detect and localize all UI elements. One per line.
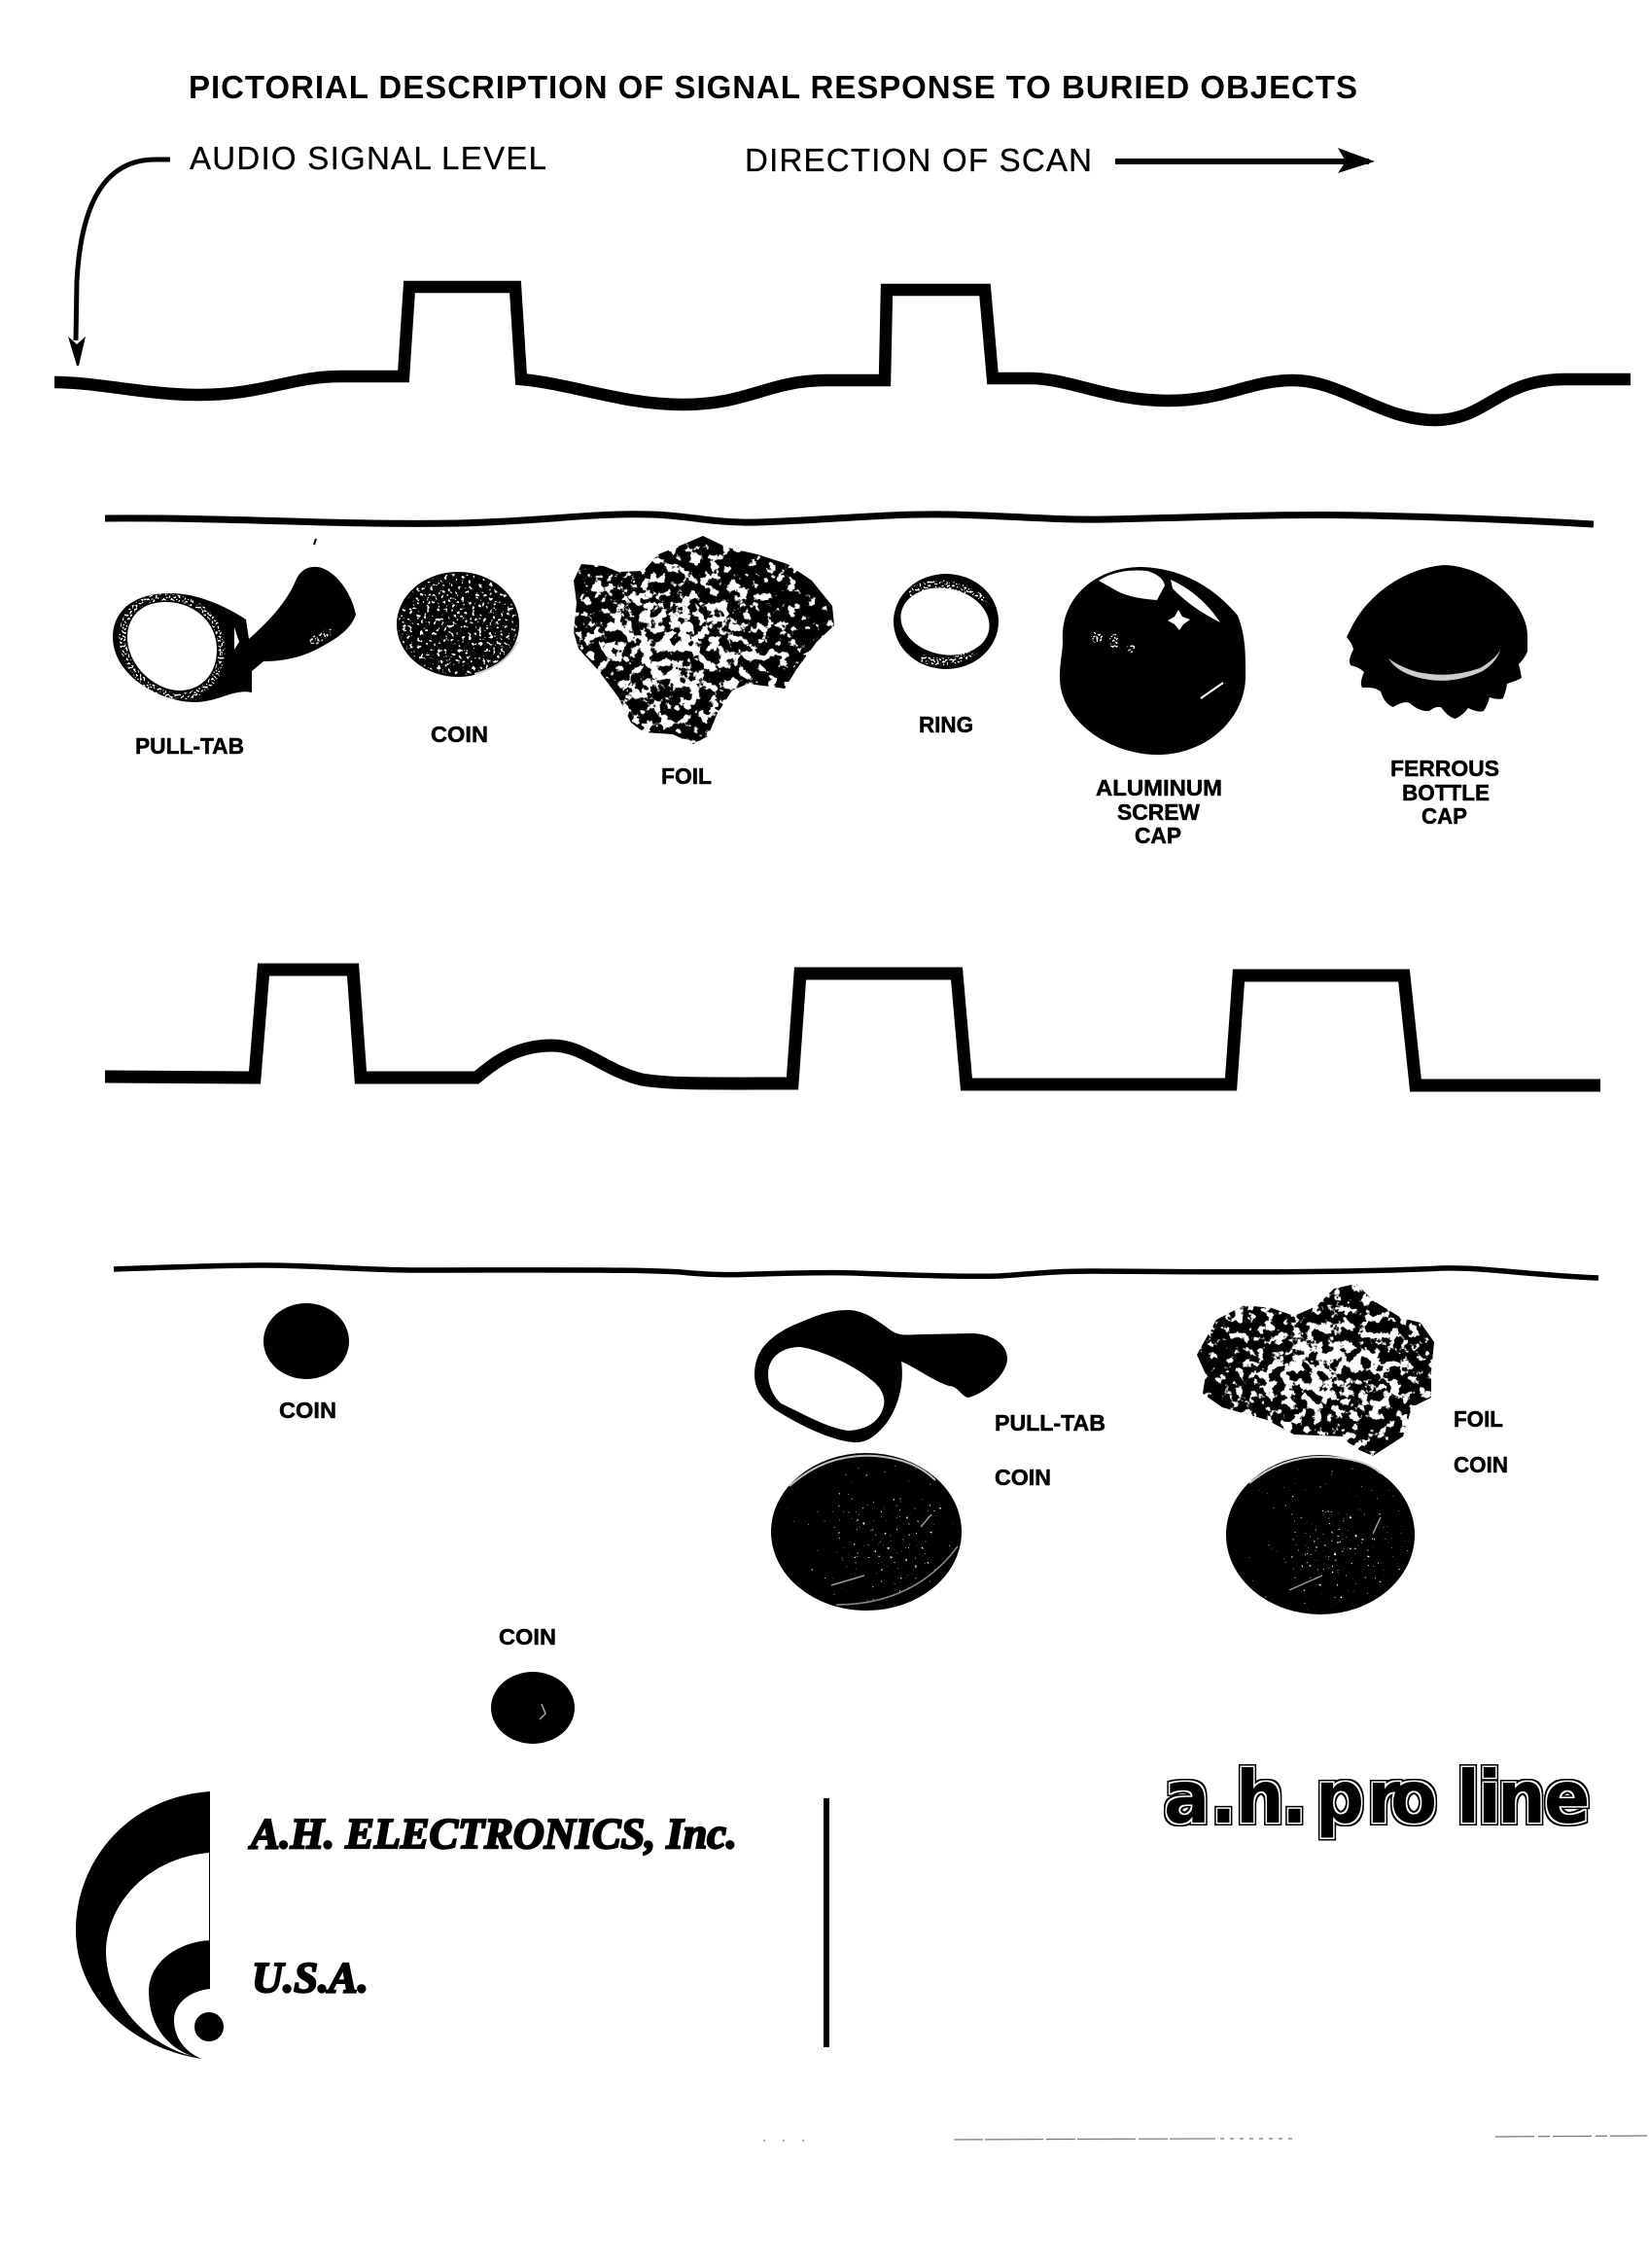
country: U.S.A.	[252, 1954, 368, 2002]
speck	[314, 539, 316, 545]
object: foil (scan 2)	[1197, 1284, 1434, 1456]
label: direction of scan: DIRECTION OF SCAN	[745, 142, 1092, 178]
label: ring: RING	[919, 712, 973, 737]
chart: audio signal waveform 1	[54, 287, 1631, 420]
label: audio signal level: AUDIO SIGNAL LEVEL	[190, 140, 546, 176]
object: coin (deep)	[491, 1672, 575, 1744]
ground line 2	[114, 1265, 1598, 1278]
object: ring	[894, 574, 999, 669]
logo: A.H. Electronics crescents	[76, 1791, 224, 2059]
label: aluminum screw cap: CAP	[1135, 823, 1181, 848]
vertical divider	[824, 1798, 829, 2047]
object: coin (scan 2, left)	[263, 1303, 349, 1379]
object: pull-tab	[113, 567, 356, 702]
arrow: direction of scan	[1115, 148, 1375, 173]
object: pull-tab (scan 2)	[754, 1310, 1007, 1442]
object: coin under pull-tab	[771, 1453, 962, 1611]
object: ferrous bottle cap	[1347, 565, 1527, 719]
label: coin under pull-tab: COIN	[995, 1465, 1051, 1490]
label: pull-tab: PULL-TAB	[135, 733, 244, 759]
label: aluminum screw cap	[1096, 775, 1222, 848]
label: aluminum screw cap: SCREW	[1117, 799, 1200, 825]
arrow: audio signal level pointer	[68, 159, 170, 366]
label: foil (scan 2): FOIL	[1454, 1406, 1503, 1432]
label: coin under foil: COIN	[1454, 1452, 1508, 1477]
object: aluminum screw cap	[1060, 567, 1246, 755]
label: ferrous bottle cap	[1390, 756, 1499, 829]
object: coin	[397, 572, 519, 677]
title: PICTORIAL DESCRIPTION OF SIGNAL RESPONSE TO BURIED OBJECTS	[189, 69, 1357, 105]
label: foil: FOIL	[661, 763, 712, 789]
label: ferrous bottle cap: CAP	[1421, 803, 1467, 829]
label: aluminum screw cap: ALUMINUM	[1096, 775, 1222, 800]
object: coin under foil	[1226, 1455, 1415, 1614]
chart: audio signal waveform 2	[105, 970, 1600, 1085]
label: coin (scan 2, left): COIN	[279, 1398, 336, 1423]
object: foil	[574, 536, 834, 744]
label: pull-tab (scan 2): PULL-TAB	[995, 1410, 1105, 1435]
ground line 1	[105, 514, 1594, 524]
label: ferrous bottle cap: BOTTLE	[1402, 780, 1490, 805]
company name: A.H. ELECTRONICS, Inc.	[248, 1810, 737, 1858]
label: ferrous bottle cap: FERROUS	[1390, 756, 1499, 781]
label: coin: COIN	[431, 722, 488, 747]
brand wordmark: a.h. pro line: a.h. pro line	[1164, 1756, 1590, 1841]
label: coin (deep): COIN	[499, 1624, 556, 1649]
scan artefacts at foot of page	[763, 2136, 1647, 2141]
